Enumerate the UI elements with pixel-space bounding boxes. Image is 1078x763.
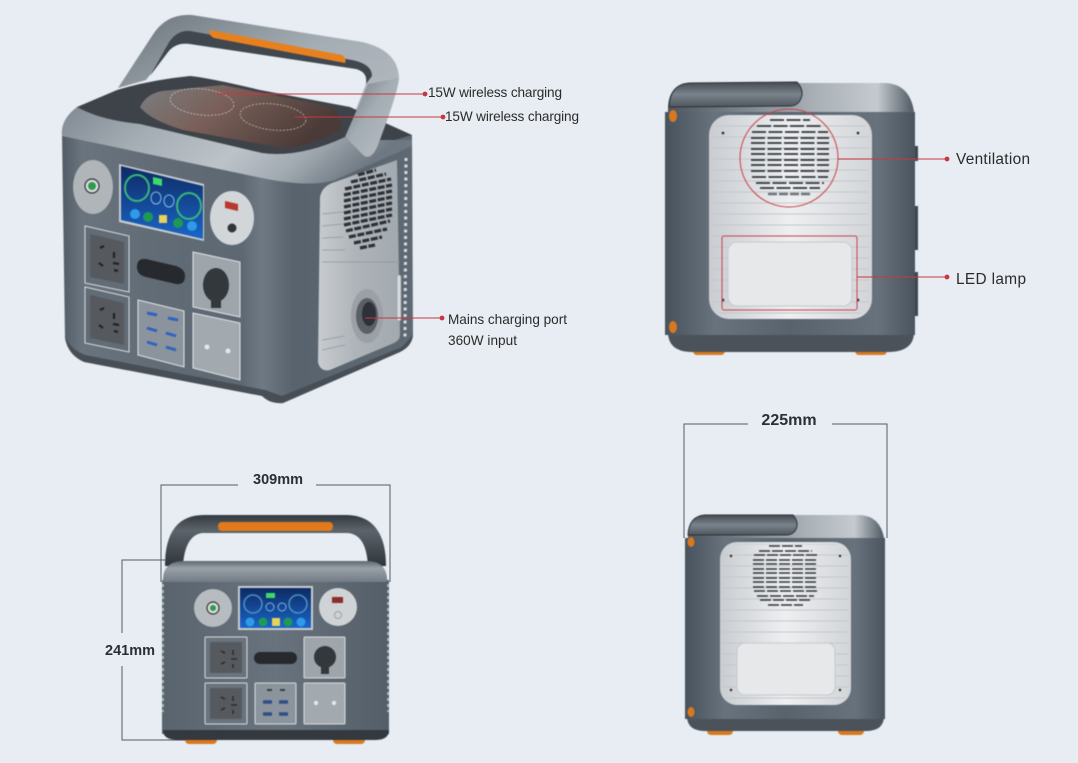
wireless coil A <box>169 86 235 118</box>
wireless charging pad <box>140 85 341 148</box>
rear panel <box>709 115 872 319</box>
handle grip <box>210 30 346 63</box>
dimension: height 241mm <box>105 560 190 740</box>
callout: mains charging port <box>365 312 567 348</box>
side perforations <box>162 584 164 712</box>
lid <box>688 515 884 538</box>
car charger panel <box>193 252 240 317</box>
AC socket 1 <box>85 226 129 292</box>
handle <box>118 15 399 157</box>
feet <box>707 727 733 735</box>
handle inner band <box>150 31 372 84</box>
callout: LED lamp: LED lamp <box>956 271 1026 288</box>
DC port panel <box>319 588 357 626</box>
vent <box>753 546 818 605</box>
base <box>687 716 884 731</box>
DC port panel <box>210 191 254 245</box>
mains charging port <box>351 289 383 343</box>
handle <box>165 515 386 566</box>
lid groove <box>688 515 797 535</box>
base <box>163 730 389 740</box>
dimension: depth 225mm: 225mm <box>761 412 817 429</box>
display pill <box>254 652 297 664</box>
callout: wireless charging A: 15W wireless charging <box>428 85 562 100</box>
lid band <box>62 107 412 184</box>
body <box>665 112 915 335</box>
feet <box>693 346 725 355</box>
USB panel <box>255 683 296 724</box>
side vent <box>344 170 392 248</box>
callout: wireless charging B: 15W wireless charging <box>445 109 579 124</box>
USB panel <box>138 300 184 367</box>
lid <box>668 83 914 112</box>
product: perspective view <box>62 15 413 403</box>
side buttons <box>915 146 918 316</box>
orange corners <box>669 110 677 122</box>
front body <box>62 135 262 394</box>
lamp control panel <box>193 313 240 380</box>
display pill <box>137 259 185 284</box>
handle grip <box>218 522 333 531</box>
bottom trim <box>65 335 413 403</box>
handle lower end <box>345 78 399 157</box>
base <box>668 332 914 352</box>
display <box>119 164 204 241</box>
lid <box>163 561 387 582</box>
vent <box>751 120 829 188</box>
car charger panel <box>304 637 345 678</box>
product: rear view with callouts <box>665 82 918 355</box>
side panel louvres <box>322 212 400 350</box>
callout: LED lamp <box>857 271 1026 288</box>
AC socket 2 <box>205 683 247 724</box>
power button panel <box>73 160 113 214</box>
power button panel <box>194 589 232 627</box>
callout: mains charging port: Mains charging port <box>448 312 567 327</box>
callout: ventilation: Ventilation <box>956 151 1030 168</box>
dimension: width 309mm <box>161 472 390 582</box>
body <box>162 580 389 734</box>
LED lamp cover <box>728 242 852 306</box>
right body <box>262 135 413 403</box>
display <box>238 586 313 630</box>
screws <box>730 555 732 557</box>
dimension: depth 225mm <box>684 412 887 538</box>
top surface <box>62 76 412 185</box>
feet <box>185 735 217 744</box>
AC socket 1 <box>205 637 247 678</box>
callout: mains charging port: 360W input <box>448 333 517 348</box>
callout: ventilation <box>838 151 1030 168</box>
product: front view <box>162 515 389 744</box>
orange corners <box>688 537 694 547</box>
wireless coil B <box>239 101 307 133</box>
dimension: width 309mm: 309mm <box>253 472 303 488</box>
LED lamp highlight <box>722 236 857 310</box>
side edge perforations <box>405 158 406 338</box>
rear panel <box>720 542 851 705</box>
lid groove <box>669 82 802 107</box>
side aluminium panel <box>318 160 400 370</box>
side slot <box>397 275 401 321</box>
dimension: height 241mm: 241mm <box>105 643 155 659</box>
callout: wireless charging A <box>217 85 562 100</box>
power button <box>207 602 219 614</box>
LED lamp cover <box>737 643 835 695</box>
body <box>685 538 885 719</box>
lamp control panel <box>304 683 345 724</box>
callout: wireless charging B <box>295 109 579 124</box>
AC socket 2 <box>85 287 129 352</box>
power button <box>85 179 99 193</box>
screws <box>722 132 724 134</box>
ventilation highlight <box>740 109 838 207</box>
product: rear view, dimensioned <box>685 515 885 735</box>
